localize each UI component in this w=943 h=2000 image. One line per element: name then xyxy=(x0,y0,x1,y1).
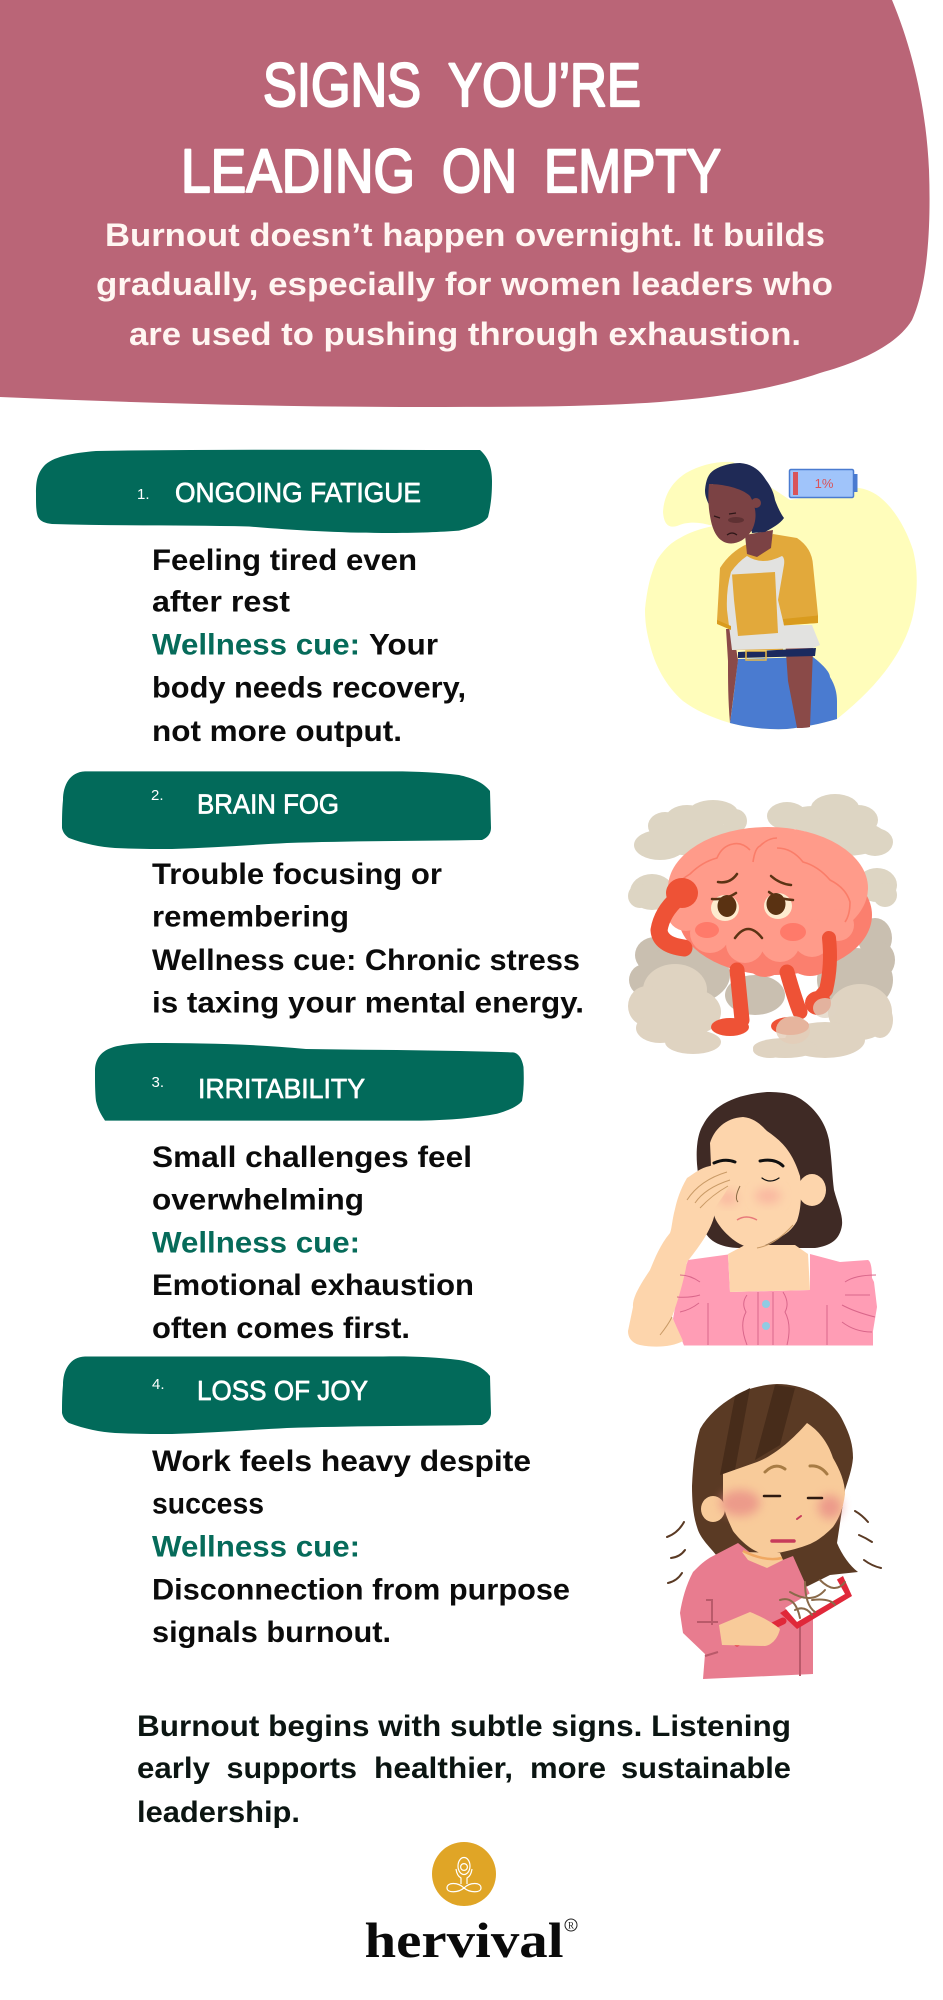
text 1: body needs recovery, xyxy=(152,672,466,705)
text 1: Wellness cue: xyxy=(152,629,360,662)
text 2: Wellness cue: Chronic stress xyxy=(152,944,580,977)
banner 2: BRAIN FOG xyxy=(197,788,339,820)
title xyxy=(181,51,721,205)
subtitle: Burnout doesn’t happen overnight. It builds xyxy=(105,217,825,253)
banner 2: 2. xyxy=(151,787,164,804)
banner 1 xyxy=(36,450,492,533)
closing statement: more xyxy=(530,1752,606,1785)
text 4: Wellness cue: xyxy=(152,1530,360,1564)
title: SIGNS xyxy=(263,51,421,119)
text 3 xyxy=(152,1141,474,1345)
text 2 xyxy=(152,858,584,1020)
text 1 xyxy=(152,544,466,748)
title: ON xyxy=(442,137,517,205)
text 3: Emotional exhaustion xyxy=(152,1269,474,1302)
closing statement: healthier, xyxy=(374,1752,513,1785)
text 1: Your xyxy=(369,629,438,662)
logo: hervival xyxy=(364,1842,577,1968)
subtitle xyxy=(96,217,833,352)
text 3: Wellness cue: xyxy=(152,1226,360,1259)
icon: woman with hair loss on brush xyxy=(667,1384,881,1679)
text 2: is taxing your mental energy. xyxy=(152,987,584,1020)
banner 3: IRRITABILITY xyxy=(198,1073,365,1104)
header blob xyxy=(0,0,930,407)
icon: tired woman with low battery xyxy=(645,462,917,729)
text 3: overwhelming xyxy=(152,1184,364,1217)
text 1: after rest xyxy=(152,586,290,618)
text 4: Disconnection from purpose xyxy=(152,1573,570,1606)
text 4: success xyxy=(152,1488,264,1521)
text 1: Feeling tired even xyxy=(152,544,417,577)
title: EMPTY xyxy=(544,137,721,205)
header panel xyxy=(0,0,930,407)
banner 1: ONGOING FATIGUE xyxy=(175,477,421,508)
title: LEADING xyxy=(181,137,415,205)
text 2: remembering xyxy=(152,900,349,934)
section 2: brain fog xyxy=(62,771,897,1058)
banner 3 xyxy=(95,1043,524,1121)
closing statement: leadership. xyxy=(137,1796,300,1829)
closing statement: early xyxy=(137,1752,210,1785)
text 3: often comes first. xyxy=(152,1312,410,1345)
section 3: irritability xyxy=(95,1043,877,1347)
section 1: ongoing fatigue xyxy=(36,450,917,748)
banner 2 xyxy=(62,771,491,849)
text 4: signals burnout. xyxy=(152,1616,391,1649)
closing statement xyxy=(137,1710,791,1829)
icon: meditation figure badge xyxy=(432,1842,496,1906)
icon: foggy brain xyxy=(628,794,897,1058)
banner 4 xyxy=(62,1356,491,1434)
text 1: not more output. xyxy=(152,715,402,748)
closing statement: sustainable xyxy=(621,1752,791,1785)
banner 4: 4. xyxy=(152,1376,165,1393)
banner 1: 1. xyxy=(137,486,150,503)
text 3: Small challenges feel xyxy=(152,1141,472,1174)
text 4: Work feels heavy despite xyxy=(152,1445,531,1478)
icon: battery xyxy=(790,470,858,498)
banner 4: LOSS OF JOY xyxy=(197,1375,368,1406)
banner 3: 3. xyxy=(152,1074,164,1091)
wordmark: hervival xyxy=(364,1912,564,1968)
section 4: loss of joy xyxy=(62,1356,881,1679)
icon: battery: 1% xyxy=(815,476,834,491)
subtitle: gradually, especially for women leaders who xyxy=(96,266,833,302)
wordmark: R xyxy=(568,1920,574,1930)
icon: woman rubbing eye xyxy=(628,1092,877,1347)
title: YOU’RE xyxy=(448,51,641,119)
subtitle: are used to pushing through exhaustion. xyxy=(129,316,801,352)
closing statement: supports xyxy=(226,1752,357,1785)
text 2: Trouble focusing or xyxy=(152,858,442,891)
closing statement: Burnout begins with subtle signs. Listening xyxy=(137,1710,791,1743)
text 4 xyxy=(152,1445,570,1649)
